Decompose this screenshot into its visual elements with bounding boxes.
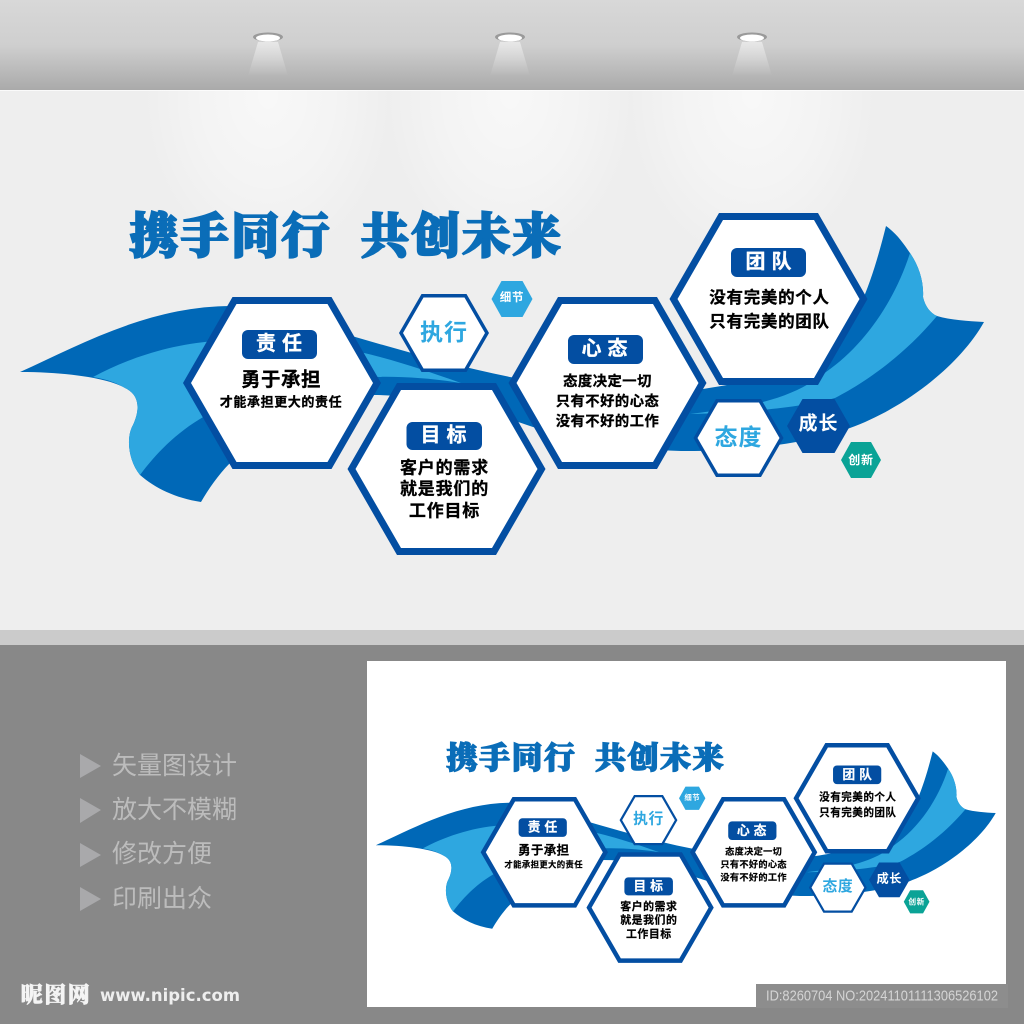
hexagon: 创新 [841, 442, 881, 478]
preview title: 共创未来 [595, 741, 725, 775]
preview ribbon: middle and right wing [585, 751, 996, 896]
preview hexagon: 态度 [809, 863, 867, 913]
preview panel [367, 661, 1006, 1007]
preview hexagon: 团队: 团队 [842, 767, 876, 782]
hexagon: 目标: 目标 [420, 424, 472, 446]
watermark logo: 昵图网 [21, 982, 91, 1008]
hexagon: 目标: 客户的需求 [400, 458, 489, 478]
hexagon: 心态: 心态 [582, 336, 634, 360]
hexagon: 目标: 工作目标 [409, 502, 480, 520]
preview hexagon: 目标: 就是我们的 [620, 912, 677, 926]
preview hexagon: 心态: 只有不好的心态 [720, 858, 787, 869]
hexagon: 目标: 就是我们的 [400, 480, 489, 498]
hexagon: 成长 [787, 399, 850, 453]
title: 携手同行 [130, 210, 332, 264]
preview hexagon: 创新 [904, 890, 929, 913]
hexagon: 执行 [399, 294, 489, 372]
hexagon: 目标 [348, 383, 546, 555]
list item: 矢量图设计: 矢量图设计 [112, 752, 237, 780]
preview hexagon: 责任: 才能承担更大的责任 [504, 859, 583, 869]
preview hexagon: 细节: 细节 [684, 793, 700, 802]
hexagon: 心态: 没有不好的工作 [556, 412, 659, 430]
preview hexagon: 团队 [793, 743, 921, 854]
preview hexagon: 心态: 心态 [737, 823, 770, 838]
preview hexagon: 目标: 工作目标 [626, 927, 672, 941]
hexagon: 心态 [508, 297, 706, 469]
preview hexagon: 责任: 责任 [528, 820, 561, 835]
title: 共创未来 [361, 210, 563, 264]
ribbon: left wing [20, 306, 250, 502]
list item: 修改方便: 修改方便 [112, 840, 212, 868]
hexagon: 责任: 责任 [256, 332, 308, 355]
preview hexagon: 成长 [869, 863, 910, 897]
preview hexagon: 创新: 创新 [908, 896, 925, 906]
hexagon: 心态: 态度决定一切 [563, 372, 652, 390]
hexagon: 责任: 勇于承担 [241, 368, 321, 391]
preview hexagon: 目标: 目标 [633, 879, 667, 894]
preview title: 携手同行 [447, 741, 577, 775]
hexagon: 团队: 没有完美的个人 [709, 287, 830, 307]
preview hexagon: 团队: 没有完美的个人 [819, 791, 896, 804]
hexagon: 责任: 才能承担更大的责任 [220, 394, 342, 410]
main wall design [20, 210, 984, 555]
hexagon: 态度 [694, 399, 784, 477]
preview hexagon: 目标 [586, 852, 714, 963]
preview hexagon: 心态 [690, 797, 817, 908]
feature list [80, 752, 237, 913]
preview hexagon: 执行 [620, 795, 677, 845]
preview of design [376, 741, 996, 963]
image id badge [756, 984, 1008, 1008]
hexagon: 团队: 只有完美的团队 [709, 311, 830, 331]
watermark logo [21, 982, 240, 1008]
hexagon: 态度: 态度 [714, 424, 762, 450]
ribbon: middle and right wing [345, 226, 984, 451]
ceiling band with spotlights [0, 0, 1024, 90]
preview hexagon: 目标: 客户的需求 [620, 899, 677, 913]
preview hexagon: 成长: 成长 [876, 871, 902, 886]
list item: 印刷出众: 印刷出众 [112, 885, 212, 913]
preview hexagon: 执行: 执行 [633, 809, 664, 827]
preview hexagon: 心态: 没有不好的工作 [720, 871, 787, 882]
preview hexagon: 细节 [679, 787, 705, 810]
preview hexagon: 责任 [481, 797, 608, 908]
floor strip [0, 630, 1024, 645]
preview ribbon: left wing [376, 803, 524, 929]
preview title [447, 741, 725, 775]
preview hexagon: 态度: 态度 [822, 877, 853, 895]
preview hexagon: 心态: 态度决定一切 [725, 846, 782, 857]
lower grey panel [0, 645, 1024, 1024]
watermark logo: www.nipic.com [100, 986, 240, 1006]
hexagon: 成长: 成长 [798, 412, 839, 434]
hexagon: 团队 [670, 213, 868, 385]
preview hexagon: 团队: 只有完美的团队 [819, 806, 896, 819]
hexagon: 团队: 团队 [746, 250, 798, 273]
hexagon: 责任 [183, 297, 381, 469]
hexagon: 创新: 创新 [848, 452, 874, 467]
hexagon: 细节: 细节 [500, 290, 524, 304]
wall backdrop [0, 90, 1024, 630]
title [130, 210, 563, 264]
hexagon: 执行: 执行 [420, 319, 468, 345]
list item: 放大不模糊: 放大不模糊 [112, 796, 237, 824]
hexagon: 心态: 只有不好的心态 [556, 392, 659, 410]
preview hexagon: 责任: 勇于承担 [518, 842, 570, 857]
hexagon: 细节 [492, 281, 532, 317]
